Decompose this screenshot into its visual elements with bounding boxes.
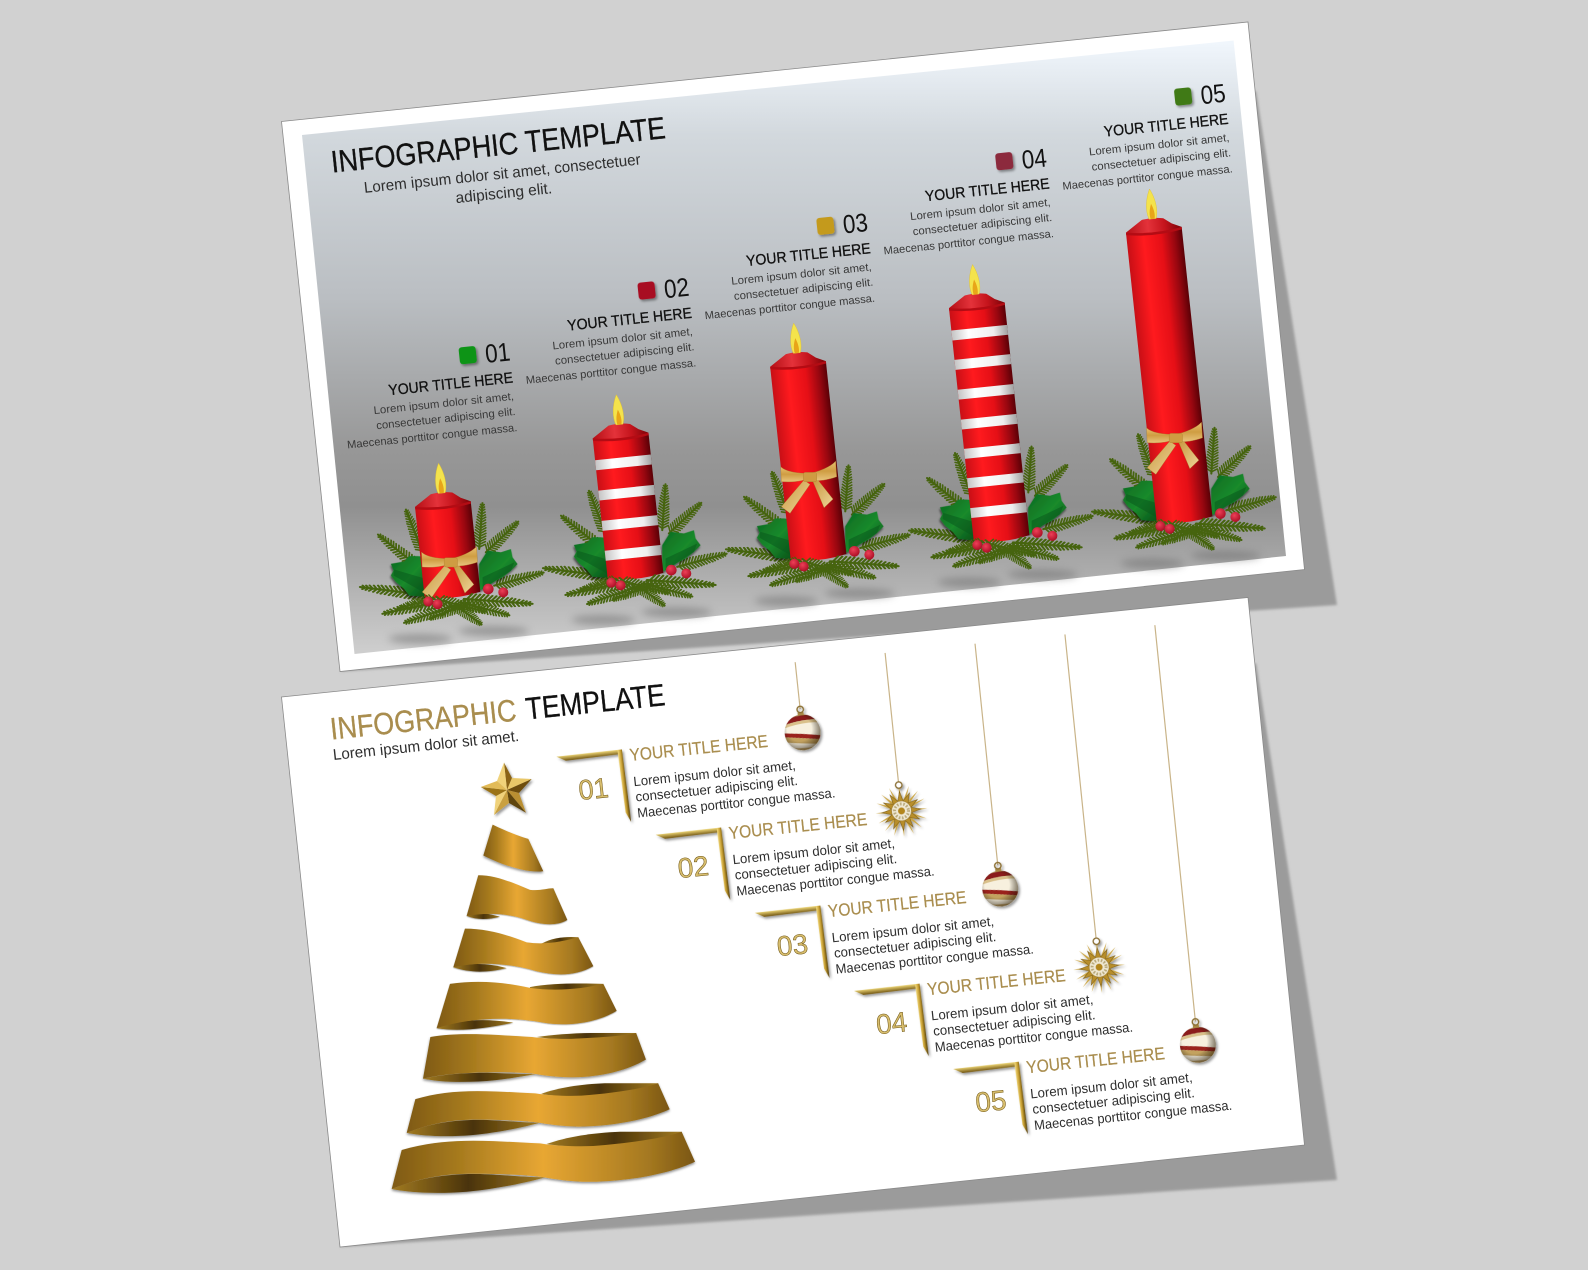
text block: candles card subtitle: adipiscing elit. xyxy=(455,180,553,207)
label 02 xyxy=(516,272,698,387)
label 05: Maecenas porttitor congue massa. xyxy=(1062,163,1233,193)
label 01: YOUR TITLE HERE xyxy=(388,370,514,399)
item 02 xyxy=(639,650,943,907)
label 01: Lorem ipsum dolor sit amet, xyxy=(373,391,515,417)
label 04 xyxy=(874,142,1055,258)
ribbon Christmas tree xyxy=(392,825,695,1193)
item 05 xyxy=(909,623,1233,1141)
item 04: 04 xyxy=(875,1006,909,1040)
ribbon tier 6 xyxy=(407,1083,670,1136)
label 01: 01 xyxy=(484,336,512,369)
heading: candles card title: INFOGRAPHIC TEMPLATE xyxy=(329,110,667,180)
item 02: Lorem ipsum dolor sit amet, xyxy=(732,836,896,867)
shadow: bottom card xyxy=(340,663,1337,1247)
shadow: top card xyxy=(340,91,1337,672)
candle 1: short with bow xyxy=(346,453,560,661)
item 02: Maecenas porttitor congue massa. xyxy=(736,863,935,899)
label 05: consectetuer adipiscing elit. xyxy=(1091,147,1232,174)
ribbon tier 2 xyxy=(467,875,567,924)
ribbon tier 3 xyxy=(453,929,593,974)
item 05: Lorem ipsum dolor sit amet, xyxy=(1029,1070,1193,1101)
label 03: Lorem ipsum dolor sit amet, xyxy=(731,261,872,288)
label 01 xyxy=(337,336,519,452)
label 04: 04 xyxy=(1020,142,1048,175)
label 04: YOUR TITLE HERE xyxy=(924,176,1050,205)
item 05: Maecenas porttitor congue massa. xyxy=(1033,1098,1233,1133)
item 03: 03 xyxy=(775,928,810,962)
label 03: consectetuer adipiscing elit. xyxy=(733,277,874,303)
label 04: Lorem ipsum dolor sit amet, xyxy=(910,197,1051,223)
item 01: YOUR TITLE HERE xyxy=(629,731,769,765)
item 04: consectetuer adipiscing elit. xyxy=(932,1007,1096,1039)
label 02: 02 xyxy=(662,272,691,304)
item 05: consectetuer adipiscing elit. xyxy=(1032,1085,1195,1117)
label 01: Maecenas porttitor congue massa. xyxy=(347,422,518,452)
item 02: YOUR TITLE HERE xyxy=(728,809,868,843)
label 02: YOUR TITLE HERE xyxy=(567,305,693,335)
item 03 xyxy=(729,641,1034,985)
label 05: Lorem ipsum dolor sit amet, xyxy=(1088,132,1230,158)
item 01: 01 xyxy=(577,772,610,806)
item 04: Maecenas porttitor congue massa. xyxy=(934,1020,1134,1055)
item 03: Maecenas porttitor congue massa. xyxy=(835,942,1034,977)
panel: tree card xyxy=(282,598,1304,1247)
item 01: consectetuer adipiscing elit. xyxy=(635,773,798,805)
item 05: YOUR TITLE HERE xyxy=(1025,1043,1166,1077)
ribbon tier 7 xyxy=(392,1132,695,1193)
candle 2: striped xyxy=(524,384,743,642)
item 04: YOUR TITLE HERE xyxy=(926,965,1067,999)
item 05: 05 xyxy=(974,1084,1008,1118)
text block: candles card subtitle xyxy=(363,151,644,216)
text block: candles card subtitle: Lorem ipsum dolor sit amet, consectetuer xyxy=(363,151,641,197)
panel: candles card xyxy=(282,22,1304,672)
label 02: Maecenas porttitor congue massa. xyxy=(525,357,697,387)
item 01: Lorem ipsum dolor sit amet, xyxy=(633,758,796,789)
item 02: 02 xyxy=(676,850,710,884)
label 01: consectetuer adipiscing elit. xyxy=(376,406,516,432)
heading: tree card title: TEMPLATE xyxy=(524,677,667,726)
label 05: 05 xyxy=(1199,78,1227,110)
label 05 xyxy=(1053,78,1234,193)
heading: tree card title: INFOGRAPHIC xyxy=(328,693,518,747)
item 03: YOUR TITLE HERE xyxy=(827,887,967,921)
candle 4: tall striped xyxy=(880,254,1109,604)
label 02: consectetuer adipiscing elit. xyxy=(554,341,695,368)
label 03: Maecenas porttitor congue massa. xyxy=(704,293,876,322)
item 01 xyxy=(549,660,836,829)
label 05: YOUR TITLE HERE xyxy=(1103,111,1229,141)
item 04 xyxy=(819,631,1140,1063)
icon: gold star tree topper xyxy=(481,762,532,815)
candle 5: tallest with bow xyxy=(1057,179,1292,585)
candle 3: tall with bow xyxy=(701,313,926,623)
item 04: Lorem ipsum dolor sit amet, xyxy=(930,992,1094,1023)
label 03: 03 xyxy=(841,207,869,240)
item 02: consectetuer adipiscing elit. xyxy=(734,851,898,883)
label 03 xyxy=(695,207,877,322)
text block: tree card subtitle: Lorem ipsum dolor sit amet. xyxy=(332,728,520,764)
item 01: Maecenas porttitor congue massa. xyxy=(636,785,836,821)
label 04: consectetuer adipiscing elit. xyxy=(912,212,1053,238)
label 02: Lorem ipsum dolor sit amet, xyxy=(552,326,693,352)
item 03: consectetuer adipiscing elit. xyxy=(833,929,997,961)
heading: tree card title xyxy=(328,677,667,747)
label 04: Maecenas porttitor congue massa. xyxy=(883,228,1054,258)
label 03: YOUR TITLE HERE xyxy=(745,240,872,270)
ribbon tier 4 xyxy=(437,982,617,1030)
item 03: Lorem ipsum dolor sit amet, xyxy=(831,914,995,945)
ribbon tier 1 xyxy=(483,825,543,872)
ribbon tier 5 xyxy=(423,1033,646,1082)
